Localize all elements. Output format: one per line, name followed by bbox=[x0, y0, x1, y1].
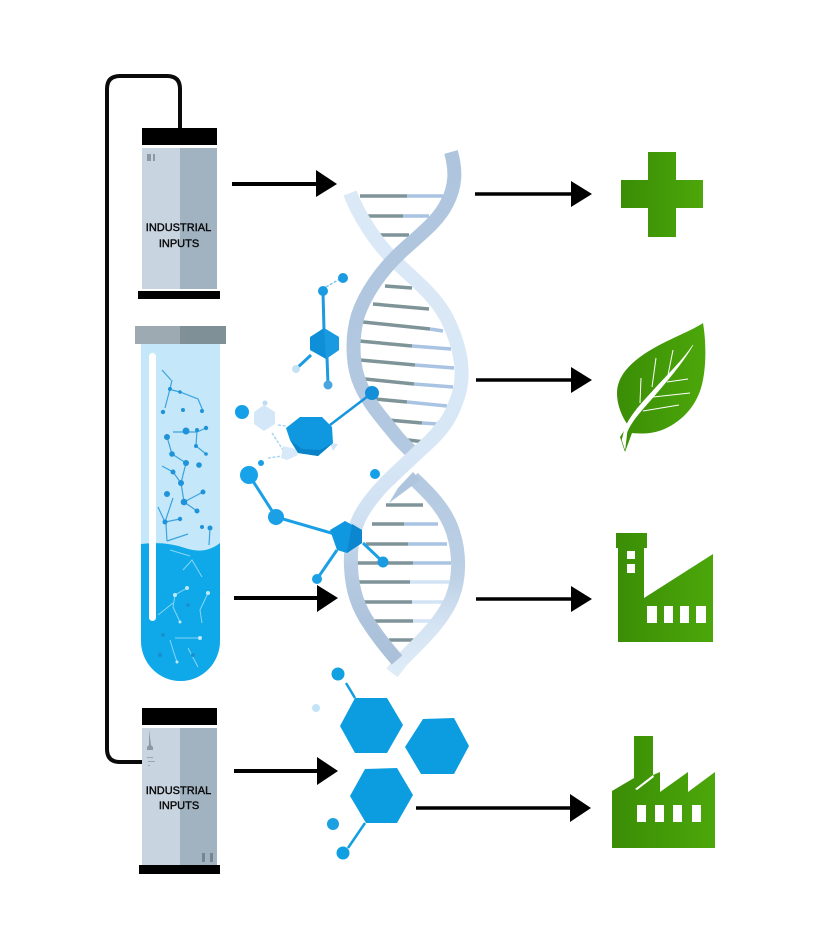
canister label: INPUTS bbox=[159, 800, 199, 812]
arrow: DNA to leaf bbox=[476, 367, 592, 393]
icon: green cross bbox=[621, 152, 703, 237]
molecule: upper bbox=[292, 273, 348, 390]
liquid bbox=[141, 543, 220, 681]
arrow: DNA to health bbox=[475, 181, 592, 207]
arrow: tube to DNA bbox=[234, 585, 338, 612]
molecules above liquid bbox=[158, 370, 212, 545]
DNA helix bbox=[350, 152, 462, 673]
arrow: bottom canister to hexagons bbox=[234, 757, 338, 785]
icon: factory with saw roof bbox=[612, 736, 715, 848]
strand: second, full length bbox=[350, 193, 462, 660]
strand: second, crossing overlap bbox=[389, 424, 444, 480]
canister label: INDUSTRIAL bbox=[146, 785, 211, 797]
molecule: middle bbox=[235, 386, 380, 479]
molecules in liquid bbox=[158, 550, 210, 667]
strand: first, upper section bbox=[354, 152, 454, 456]
icon: leaf bbox=[617, 323, 705, 452]
top canister bbox=[138, 128, 220, 299]
molecule: lower bbox=[240, 466, 388, 584]
hexagon cluster bbox=[312, 668, 469, 860]
arrow: DNA to factory bbox=[476, 586, 592, 612]
arrow: top canister to DNA bbox=[232, 170, 337, 197]
canister label: INDUSTRIAL bbox=[146, 222, 211, 234]
arrow: hexagons to factory bbox=[416, 794, 591, 822]
connecting pipe bbox=[107, 76, 180, 762]
strand: first, lower section bbox=[392, 478, 458, 673]
rungs bbox=[357, 196, 454, 640]
test tube bbox=[135, 326, 226, 681]
icon: factory with tower bbox=[616, 533, 713, 642]
canister label: INPUTS bbox=[159, 238, 199, 250]
bottom canister bbox=[139, 708, 220, 874]
